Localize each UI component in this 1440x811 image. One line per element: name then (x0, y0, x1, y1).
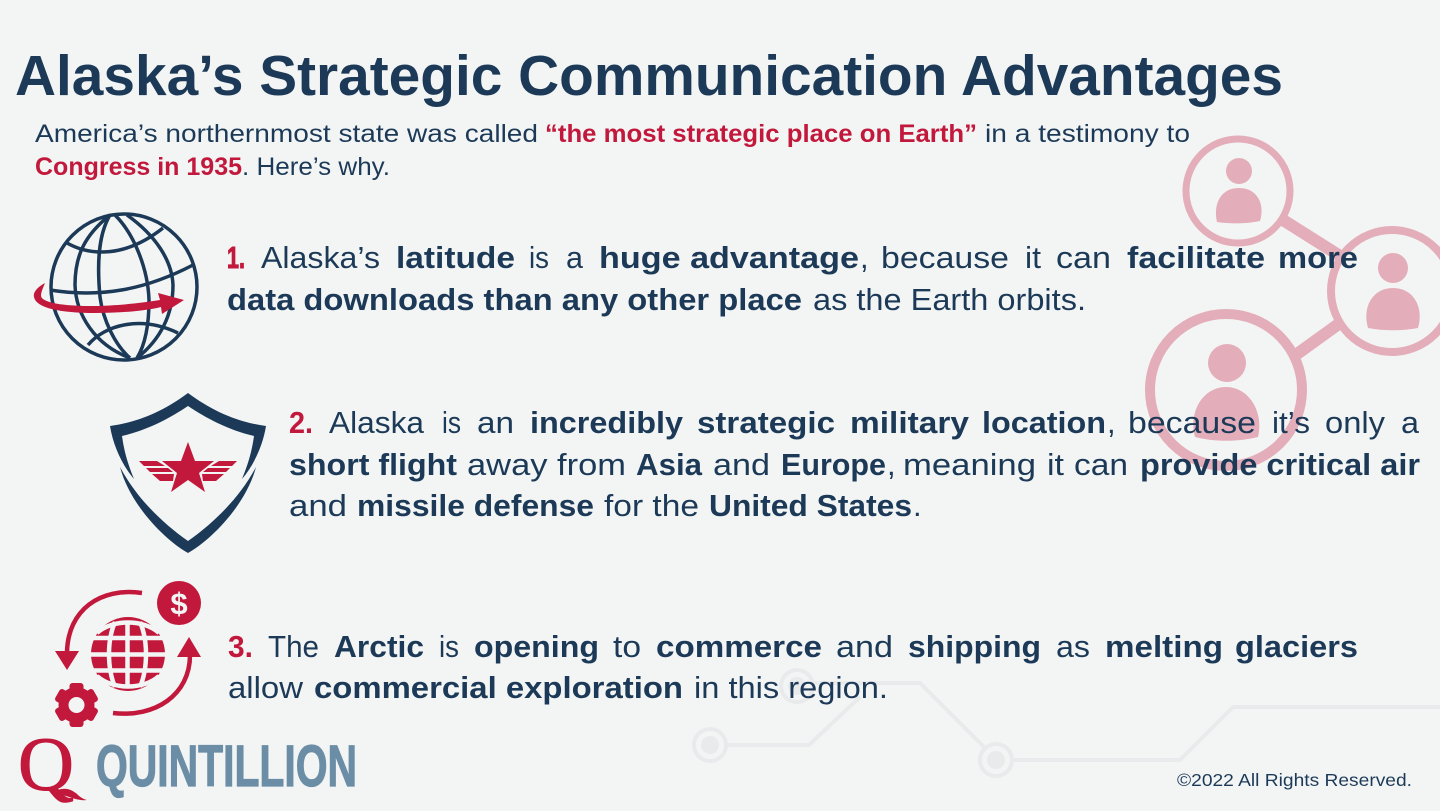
item 1 text: a (566, 240, 584, 275)
logo: Quintillion (18, 723, 357, 807)
item 2 text: it’s (1272, 405, 1310, 440)
icon: shield with winged star (110, 393, 266, 553)
background circuit pattern (694, 670, 1440, 776)
item 1 text: latitude (396, 240, 515, 275)
item 1 text: huge advantage (599, 240, 859, 275)
item 2 text: and (289, 488, 347, 523)
item 1 text (227, 240, 1358, 317)
item 2 text: provide critical air (1140, 447, 1420, 482)
item 2 text: 2. (289, 405, 313, 440)
item 2 text: only (1325, 405, 1386, 440)
item 2 text: a (1401, 405, 1420, 440)
icon: globe with commerce cycle: $ (170, 586, 188, 621)
item 2 text: , (887, 447, 896, 482)
item 1 text: can (1056, 240, 1111, 275)
item 2 text: and (713, 447, 770, 482)
item 1 text: Alaska’s (261, 240, 380, 275)
item 3 text: allow (228, 670, 304, 705)
item 2 text: is (442, 405, 461, 440)
item 1 text: more (1278, 240, 1358, 275)
item 2 text: can (1074, 447, 1128, 482)
item 3 text: commerce (656, 629, 822, 664)
item 3 text: The (268, 629, 319, 664)
item 1 text: data downloads than any other place (227, 282, 802, 317)
item 3 text: as (1056, 629, 1090, 664)
item 2 text: strategic (697, 405, 835, 440)
item 1 text: is (529, 240, 549, 275)
item 3 text: melting (1105, 629, 1223, 664)
intro text: “the most strategic place on Earth” (545, 120, 977, 148)
item 2 text: United States (709, 488, 912, 523)
item 3 text: and (836, 629, 893, 664)
intro text: in a testimony to (985, 120, 1190, 148)
item 1 text: it (1025, 240, 1041, 275)
item 3 text: in this region. (694, 670, 888, 705)
intro text: America’s northernmost state was called (35, 120, 538, 148)
icon: globe with commerce cycle (54, 581, 201, 727)
title: Alaska’s Strategic Communication Advantages (15, 44, 1283, 108)
item 2 text: incredibly (530, 405, 684, 440)
item 3 text: commercial exploration (314, 670, 683, 705)
item 3 text: opening (474, 629, 599, 664)
copyright: ©2022 All Rights Reserved. (1177, 770, 1412, 790)
item 3 text: 3. (228, 629, 253, 664)
item 2 text (289, 405, 1420, 523)
item 2 text: Asia (636, 447, 703, 482)
item 1 text: , (860, 240, 869, 275)
item 2 text: away from (467, 447, 626, 482)
item 2 text: military (850, 405, 970, 440)
item 2 text: it (1047, 447, 1064, 482)
item 1 text: as the Earth orbits. (813, 282, 1086, 317)
intro text: Congress in 1935 (35, 153, 242, 181)
logo: Quintillion: Q (18, 723, 74, 807)
item 3 text: shipping (908, 629, 1041, 664)
icon: people network (1150, 139, 1440, 466)
item 2 text: for the (604, 488, 699, 523)
item 2 text: because (1128, 405, 1256, 440)
item 2 text: Alaska (329, 405, 425, 440)
item 3 text: glaciers (1235, 629, 1358, 664)
item 2 text: an (477, 405, 514, 440)
item 3 text: Arctic (334, 629, 424, 664)
item 2 text: missile defense (357, 488, 594, 523)
item 3 text: is (439, 629, 459, 664)
item 3 text: to (613, 629, 641, 664)
item 1 text: 1. (227, 240, 245, 275)
item 2 text: location (982, 405, 1106, 440)
item 2 text: , (1107, 405, 1116, 440)
intro text (35, 120, 1190, 181)
icon: globe with orbit arrow (34, 214, 197, 360)
item 2 text: meaning (903, 447, 1036, 482)
item 2 text: . (913, 488, 922, 523)
item 1 text: because (881, 240, 1009, 275)
item 1 text: facilitate (1127, 240, 1265, 275)
logo: Quintillion: QUINTILLION (96, 734, 357, 799)
item 2 text: Europe (781, 447, 886, 482)
intro text: . Here’s why. (242, 153, 390, 181)
item 3 text (228, 629, 1358, 705)
item 2 text: short flight (289, 447, 457, 482)
